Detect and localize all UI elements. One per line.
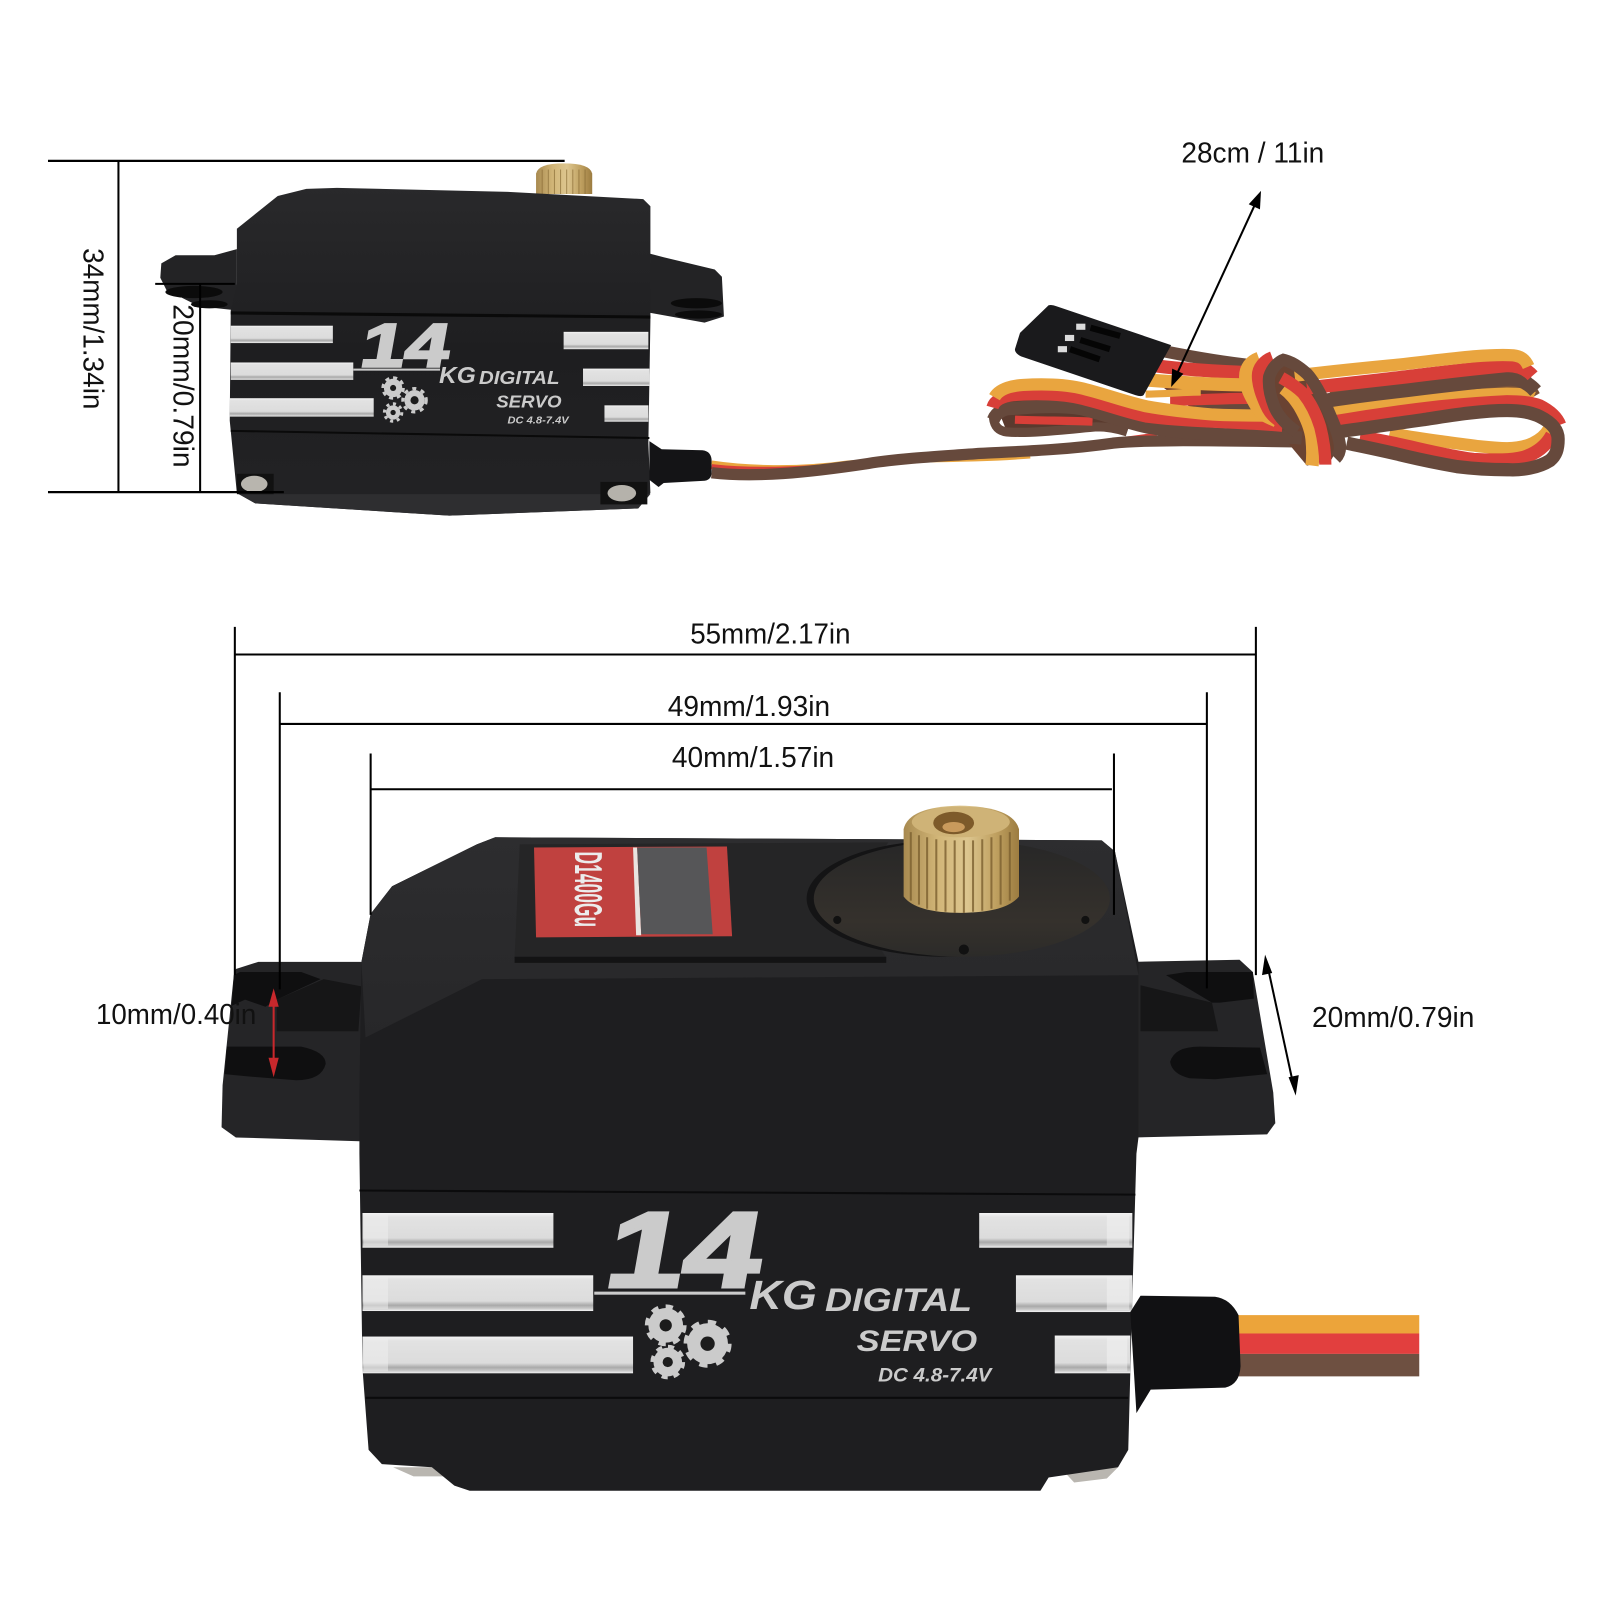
top servo cable boot [649, 441, 712, 487]
main body [359, 837, 1138, 1491]
black double arrow [1262, 955, 1299, 1096]
cable wires [1230, 1315, 1419, 1376]
top servo brass output gear [536, 163, 592, 194]
silver bars right [979, 1213, 1132, 1373]
red double arrow [269, 988, 279, 1077]
top servo screws [237, 474, 647, 504]
label: 55mm: 55mm/2.17in [690, 618, 851, 650]
top servo logo [353, 312, 570, 427]
label: cable length: 28cm / 11in [1181, 137, 1324, 169]
wires leaving connector [1146, 351, 1262, 408]
cable boot [1130, 1296, 1241, 1413]
three-pin connector [1015, 305, 1171, 396]
top servo silver bars [230, 326, 649, 422]
top servo logo: DIGITAL [479, 367, 560, 388]
red model label: D1400Gu [566, 852, 609, 927]
top servo photo [160, 163, 724, 516]
logo: DC 4.8-7.4V [878, 1364, 994, 1386]
logo [594, 1190, 994, 1386]
label: 20mm height: 20mm/0.79in [167, 304, 199, 468]
logo: DIGITAL [825, 1281, 972, 1318]
right upper lobe [1295, 355, 1536, 402]
left mounting flange [222, 962, 368, 1142]
cable backing fill [996, 357, 1540, 466]
top servo right mounting flange [648, 253, 724, 323]
arrow: cable length [1171, 191, 1261, 387]
right mounting flange [1133, 960, 1275, 1137]
logo: SERVO [857, 1325, 977, 1358]
label recess [515, 842, 888, 960]
main thin cable [712, 435, 1307, 475]
top servo left mounting flange [160, 249, 237, 310]
dimension: 10mm hole spacing [96, 988, 279, 1077]
label: 10mm: 10mm/0.40in [96, 999, 256, 1031]
top surface [361, 837, 1138, 1037]
left lobe band [992, 384, 1302, 438]
gears icon [647, 1307, 729, 1377]
body seam lines [359, 1191, 1135, 1398]
right lower lobe [1327, 393, 1560, 470]
top servo logo: SERVO [496, 391, 562, 411]
top servo logo: 14 [356, 312, 456, 380]
red model label [534, 846, 732, 937]
servo cable and knot [712, 305, 1560, 475]
top servo gears icon [383, 378, 426, 421]
output disc [807, 840, 1110, 957]
label: 40mm: 40mm/1.57in [672, 742, 834, 774]
logo: KG [749, 1272, 817, 1318]
silver bars left [362, 1213, 633, 1373]
label: 20mm depth: 20mm/0.79in [1312, 1002, 1474, 1034]
dimension: connector cable length [1171, 137, 1324, 387]
top servo body [230, 188, 650, 516]
top servo logo: DC 4.8-7.4V [507, 416, 570, 427]
logo: 14 [598, 1190, 773, 1309]
label: 34mm: 34mm/1.34in [77, 248, 109, 409]
label: 49mm: 49mm/1.93in [668, 691, 830, 723]
top servo logo: KG [439, 362, 476, 388]
brass output gear [904, 806, 1019, 913]
knot [1246, 357, 1340, 466]
bottom servo photo [222, 806, 1419, 1491]
dimension: 20mm flange depth [1262, 955, 1474, 1096]
silver screw edges [393, 1467, 1118, 1483]
